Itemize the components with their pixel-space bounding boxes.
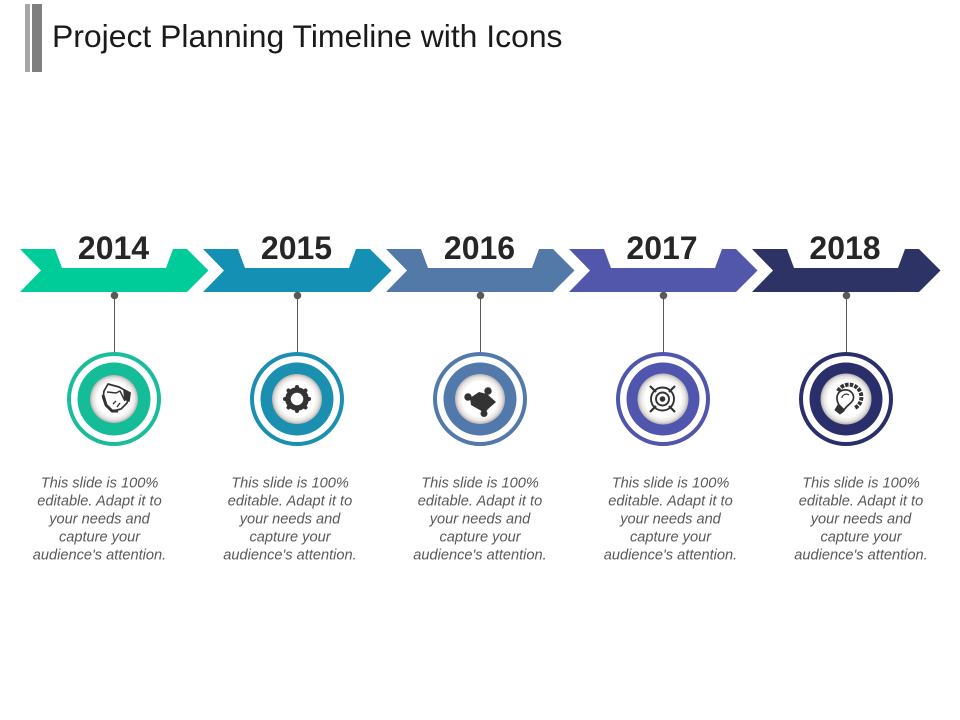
description 2016: audience's attention.: [413, 548, 547, 564]
icon: gear: [285, 387, 309, 411]
description 2017: capture your: [630, 530, 712, 546]
description 2015: your needs and: [239, 512, 341, 528]
description 2014: audience's attention.: [33, 548, 166, 564]
description 2015: audience's attention.: [223, 548, 357, 564]
description 2018: audience's attention.: [794, 548, 928, 564]
icon: target: [650, 386, 675, 412]
step 2014: [20, 230, 208, 564]
circle badge 2018: [801, 354, 891, 444]
year 2018: 2018: [809, 230, 881, 266]
description 2018: editable. Adapt it to: [799, 494, 923, 510]
connector 2018: [843, 292, 850, 353]
circle badge 2014: [69, 354, 159, 444]
description 2015: editable. Adapt it to: [228, 494, 352, 510]
title: Project Planning Timeline with Icons: [52, 18, 562, 54]
arrow 2014: [20, 249, 208, 292]
description 2017: editable. Adapt it to: [608, 494, 733, 510]
connector 2015: [294, 292, 301, 353]
description 2016: This slide is 100%: [421, 476, 539, 492]
icon: puzzle piece: [464, 387, 496, 417]
description 2014: This slide is 100%: [41, 476, 158, 492]
year 2014: 2014: [78, 230, 149, 266]
arrow 2018: [752, 249, 940, 292]
circle badge 2015: [252, 354, 342, 444]
description 2014: capture your: [59, 530, 141, 546]
icon: handshake: [103, 384, 130, 411]
arrow 2015: [203, 249, 392, 292]
circle badge 2017: [618, 354, 708, 444]
description 2016: editable. Adapt it to: [418, 494, 542, 510]
description 2017: your needs and: [619, 512, 722, 528]
arrow 2017: [569, 249, 758, 292]
connector 2017: [660, 292, 667, 353]
icon: gear with light bulb: [835, 385, 861, 414]
year 2017: 2017: [626, 230, 698, 266]
connector 2014: [111, 292, 118, 353]
year 2016: 2016: [444, 230, 515, 266]
description 2015: capture your: [249, 530, 332, 546]
description 2016: your needs and: [429, 512, 531, 528]
year 2015: 2015: [261, 230, 332, 266]
step 2017: [569, 230, 758, 564]
step 2015: [203, 230, 392, 564]
description 2018: capture your: [820, 530, 903, 546]
description 2017: This slide is 100%: [612, 476, 729, 492]
circle badge 2016: [435, 354, 525, 444]
description 2018: your needs and: [810, 512, 912, 528]
step 2016: [386, 230, 574, 564]
arrow 2016: [386, 249, 574, 292]
description 2018: This slide is 100%: [802, 476, 920, 492]
title accent bars: [25, 4, 42, 72]
description 2014: editable. Adapt it to: [37, 494, 162, 510]
connector 2016: [477, 292, 484, 353]
description 2017: audience's attention.: [604, 548, 737, 564]
description 2014: your needs and: [48, 512, 151, 528]
description 2016: capture your: [439, 530, 522, 546]
description 2015: This slide is 100%: [231, 476, 349, 492]
step 2018: [752, 230, 940, 564]
